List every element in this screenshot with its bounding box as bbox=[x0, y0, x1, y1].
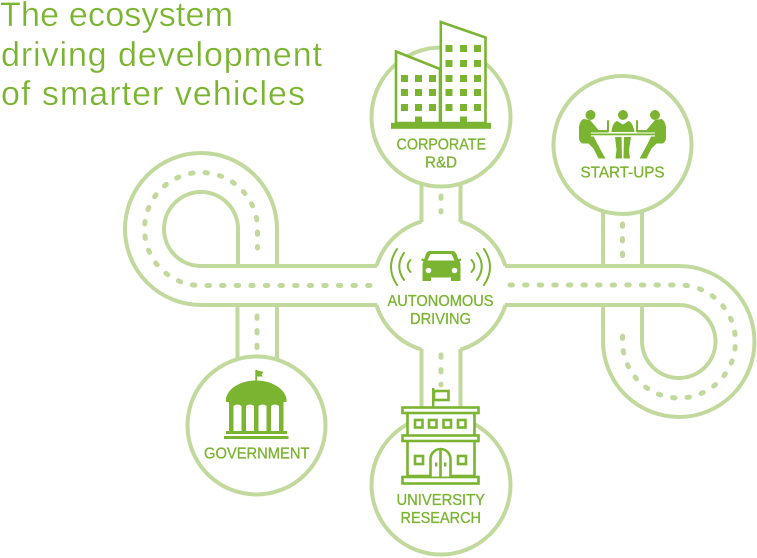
label: corporate R&D: R&D bbox=[425, 154, 457, 172]
label: university research bbox=[396, 492, 485, 527]
label: corporate R&D: CORPORATE bbox=[396, 136, 486, 154]
panel: university research bbox=[372, 388, 510, 554]
road: branch to corporate R&D bbox=[422, 180, 460, 222]
road: branch to university research bbox=[422, 349, 460, 420]
road: branch to government bbox=[238, 305, 277, 365]
label: autonomous driving: DRIVING bbox=[410, 311, 471, 328]
panel: autonomous driving bbox=[388, 249, 494, 328]
icon: car with signal waves bbox=[391, 249, 490, 285]
icon: domed capitol building bbox=[224, 370, 288, 439]
icon: people at a table bbox=[579, 110, 666, 158]
icon: university building bbox=[402, 388, 478, 484]
label: government: GOVERNMENT bbox=[204, 446, 310, 462]
title: of smarter vehicles bbox=[1, 75, 305, 113]
title bbox=[0, 0, 323, 113]
road network bbox=[125, 153, 754, 420]
label: autonomous driving: AUTONOMOUS bbox=[388, 293, 494, 310]
label: autonomous driving bbox=[388, 293, 494, 328]
title: driving development bbox=[1, 36, 323, 74]
panel: start-ups bbox=[554, 76, 692, 214]
panel: corporate R&D bbox=[372, 22, 510, 186]
central hub outline bbox=[376, 222, 506, 350]
icon: office buildings bbox=[391, 22, 491, 129]
road: left loop bbox=[125, 153, 377, 305]
label: university research: RESEARCH bbox=[400, 510, 481, 527]
road: branch to start-ups bbox=[603, 205, 642, 266]
label: corporate R&D bbox=[396, 136, 486, 172]
label: university research: UNIVERSITY bbox=[396, 492, 485, 509]
road: right loop bbox=[505, 266, 754, 417]
panel: government bbox=[188, 356, 326, 494]
label: start-ups: START-UPS bbox=[580, 164, 664, 182]
